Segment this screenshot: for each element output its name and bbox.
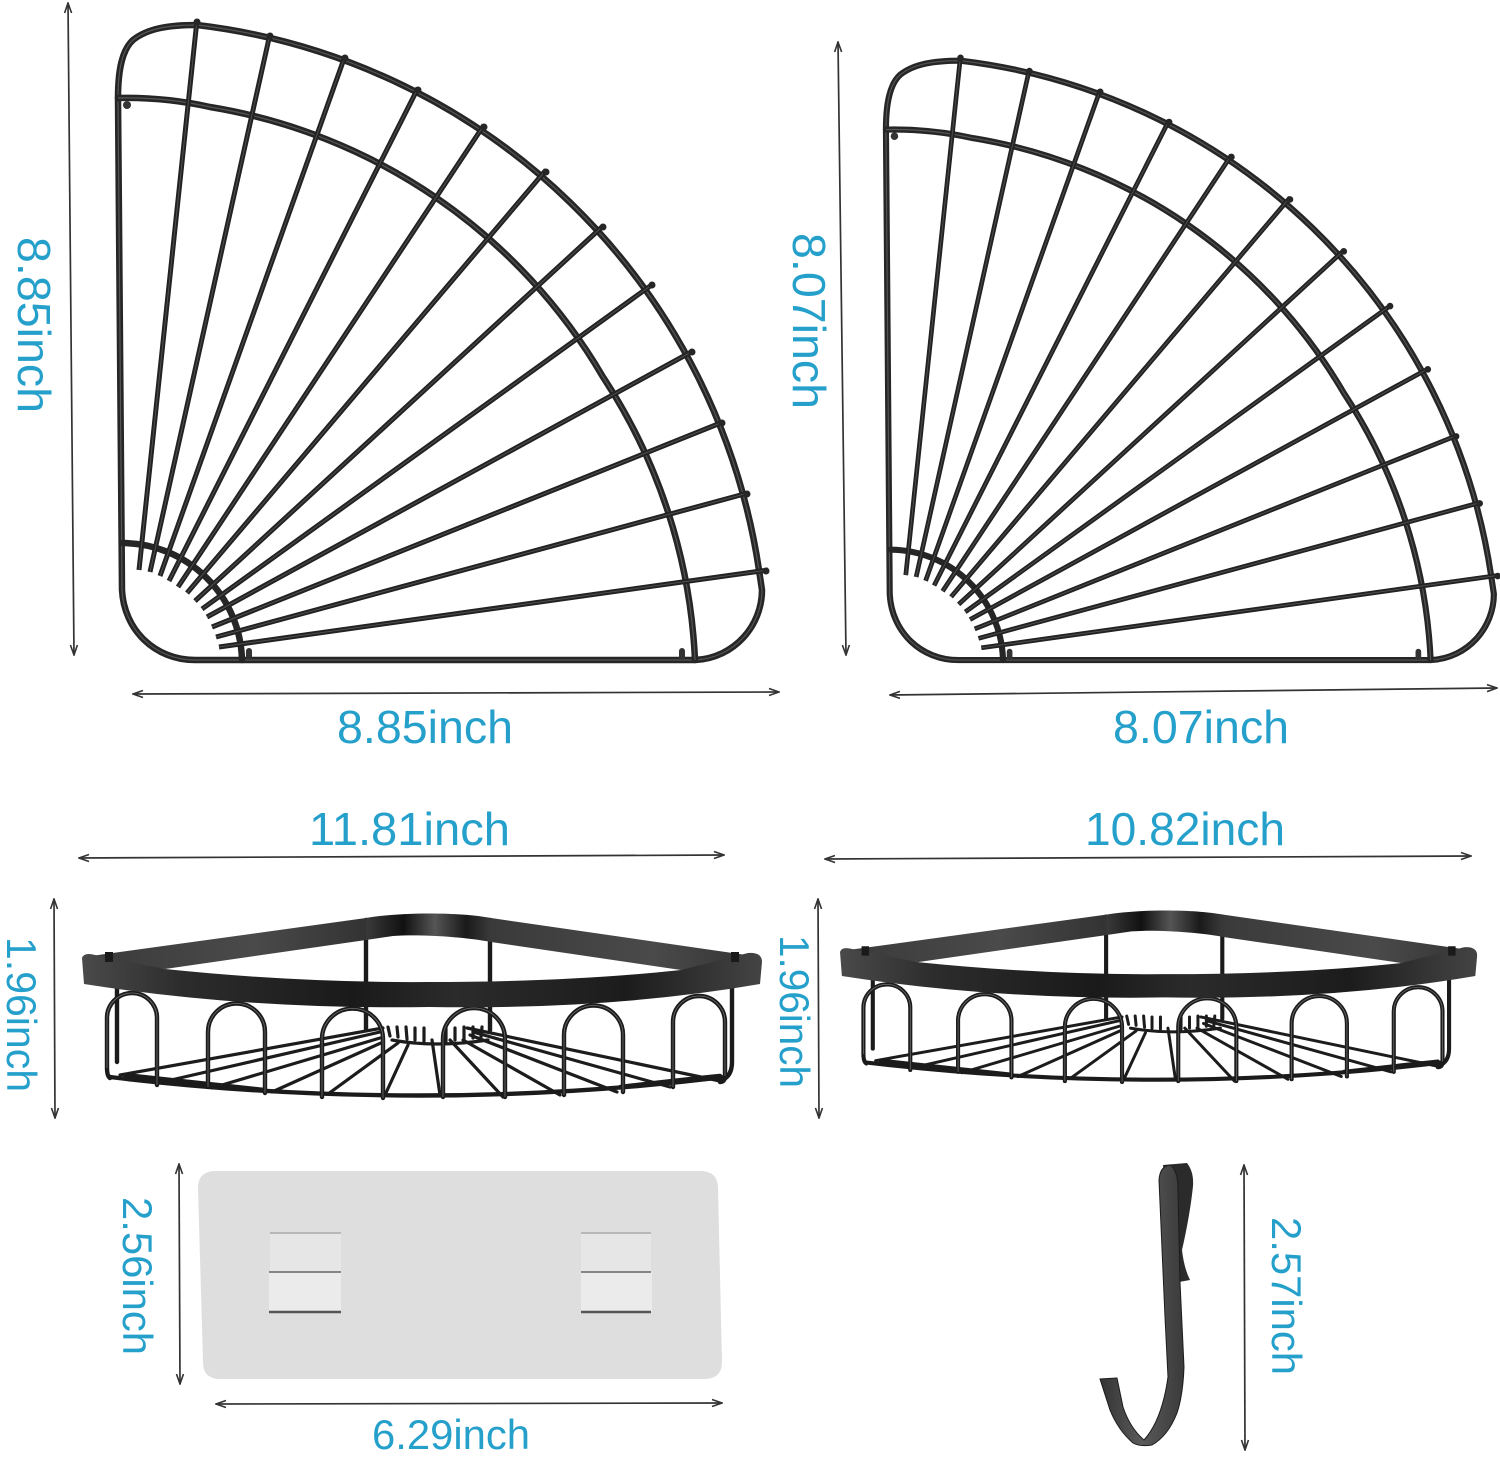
right clip [581,1233,652,1312]
rim end notches [105,952,739,962]
basket front view: large [82,914,762,1098]
outer arc [197,25,759,570]
adhesive mounting plate [198,1171,722,1379]
arrow: small top height [838,42,846,655]
arrow: big front height [54,899,55,1118]
arrow: small front width [825,856,1471,859]
hook back leaf [1163,1163,1193,1282]
basket top view: large [118,18,770,660]
arrow: big front width [79,855,724,858]
arrow: small front height [818,899,819,1118]
hub arc [123,543,242,660]
label: 8.07 width: 8.07inch [1113,701,1289,753]
label: 8.07 height: 8.07inch [783,233,835,409]
wire arches [107,993,725,1098]
arrow: big top height [68,3,74,655]
label: 2.56 plate height: 2.56inch [114,1197,161,1355]
rear posts [117,920,732,1080]
label: 6.29 plate width: 6.29inch [372,1411,530,1458]
radial spokes [139,20,768,647]
arrow: hook height [1244,1165,1245,1450]
arrow: big top width [133,692,779,694]
door hook [1100,1163,1193,1446]
label: 11.81 width: 11.81inch [309,803,510,855]
inner arc [118,98,695,660]
hook strap [1100,1165,1184,1446]
rim front band [82,953,762,1007]
label: 1.96 height right: 1.96inch [771,935,818,1088]
outer frame [118,25,762,660]
spoke end knobs [194,18,770,574]
basket front view: small [840,910,1477,1082]
frame joints [123,101,685,660]
rim back right [491,918,760,970]
rim back centre [366,914,491,942]
plate body [198,1171,722,1379]
hub ticks [388,1027,488,1044]
label: 8.85 width: 8.85inch [337,701,513,753]
basket top view: small [886,55,1500,660]
left clip [269,1233,341,1312]
floor spokes [120,1028,720,1097]
label: 2.57 hook height: 2.57inch [1263,1217,1310,1375]
inner arc highlight [118,98,695,660]
outer frame highlight [118,25,762,660]
bottom rails [110,1075,725,1096]
label: 8.85 height: 8.85inch [8,237,60,413]
arrow: small top width [890,688,1497,695]
arrow: plate width [216,1403,722,1404]
arrow: plate height [179,1164,180,1384]
rim back left [84,918,366,969]
label: 10.82 width: 10.82inch [1085,803,1285,855]
dimension labels [0,233,1310,1458]
